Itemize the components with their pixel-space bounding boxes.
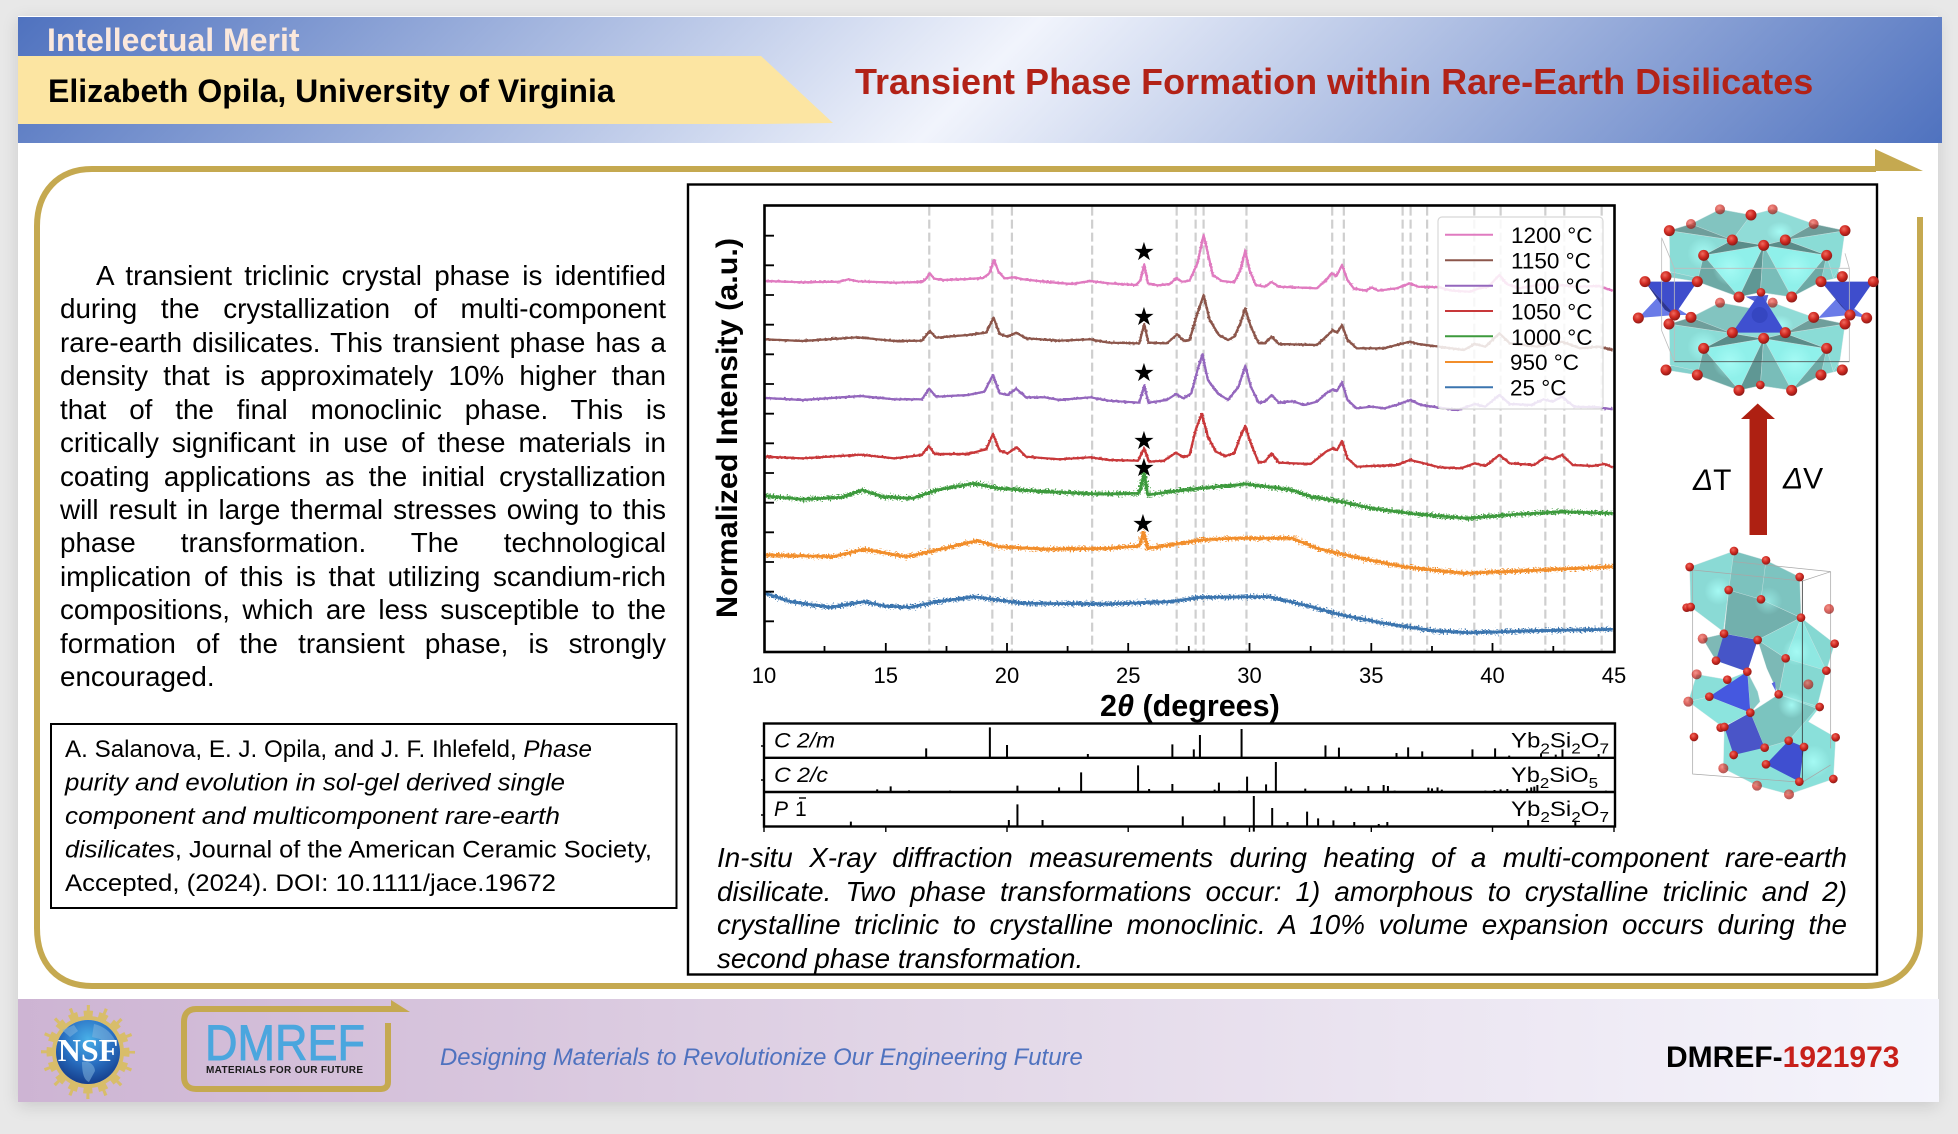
crystal structure: triclinic bottom (1682, 547, 1840, 799)
central gap (1750, 647, 1773, 698)
star markers: ★ (1133, 453, 1155, 482)
DMREF tagline: MATERIALS FOR OUR FUTURE (206, 1065, 363, 1076)
compound labels (1511, 730, 1609, 826)
phase labels: 1 (795, 798, 807, 821)
main body text: density that is approximately 10% higher than (60, 360, 666, 391)
compound labels: O (1581, 730, 1599, 752)
figure panel border (688, 184, 1877, 974)
compound labels: Si (1550, 798, 1571, 821)
legend: 1150 °C (1511, 248, 1591, 274)
reference stick patterns (761, 724, 1615, 832)
presenter name: Elizabeth Opila, University of Virginia (48, 73, 615, 109)
NSF logo (45, 1009, 131, 1095)
x axis tick labels: 10 (752, 663, 776, 688)
footer band (18, 999, 1939, 1102)
compound labels: 2 (1571, 809, 1581, 826)
compound labels: SiO (1549, 764, 1589, 787)
x axis tick labels: 40 (1480, 663, 1505, 688)
compound labels: 2 (1571, 740, 1581, 758)
arrow: heating transformation (1741, 404, 1775, 535)
figure caption: disilicate. Two phase transformations occur: 1) amorphous to crystalline triclinic and 2) (717, 876, 1847, 907)
phase labels: P (774, 798, 788, 821)
compound labels: 2 (1540, 775, 1549, 792)
figure caption: second phase transformation. (717, 943, 1083, 974)
compound labels: 7 (1599, 809, 1609, 826)
plot frame and ticks (764, 206, 1614, 652)
stick panel frames (761, 724, 1615, 832)
crystalline traces noise (766, 235, 1613, 468)
phase labels: C 2/c (774, 764, 829, 787)
section label: Intellectual Merit (47, 22, 300, 58)
DMREF logo (184, 1000, 410, 1089)
main body text: compositions, which are less susceptible to the (60, 594, 666, 625)
compound labels: Yb (1511, 798, 1537, 821)
main body text: implication of this is that utilizing scandium-rich (60, 561, 666, 592)
main body text: during the crystallization of multi-component (60, 293, 666, 324)
compound labels: 5 (1589, 775, 1598, 792)
x axis title: 2θ (degrees) (1100, 689, 1280, 723)
x axis tick labels: 15 (874, 663, 898, 688)
gold frame arrow (37, 149, 1923, 986)
legend (1438, 217, 1603, 409)
crystal structure: monoclinic top (1633, 204, 1879, 396)
figure caption: In-situ X-ray diffraction measurements during heating of a multi-component rare-earth (717, 842, 1847, 873)
main body text: coating applications as the initial crystallization (60, 461, 666, 492)
citation box (51, 724, 676, 908)
P-1 sticks (851, 796, 1575, 832)
x axis tick labels: 35 (1359, 663, 1384, 688)
figure caption: crystalline triclinic to crystalline monoclinic. A 10% volume expansion occurs during the (717, 909, 1847, 940)
legend: 1000 °C (1511, 325, 1593, 350)
x axis tick labels: 20 (995, 663, 1019, 688)
C 2/c sticks (877, 762, 1606, 792)
main body text: will result in large thermal stresses owing to this (60, 494, 666, 525)
compound labels: 2 (1540, 740, 1550, 758)
citation box: Accepted, (2024). DOI: 10.1111/jace.19672 (65, 870, 556, 897)
footer tagline: Designing Materials to Revolutionize Our Engineering Future (440, 1044, 1083, 1071)
reference dashed lines (929, 207, 1602, 651)
x axis tick labels: 25 (1116, 663, 1140, 688)
DMREF wordmark: DMREF (205, 1015, 365, 1071)
y axis title: Normalized Intensity (a.u.) (711, 238, 744, 618)
compound labels: 2 (1540, 809, 1550, 826)
silicate tetrahedra (1638, 282, 1873, 333)
citation box: purity and evolution in sol-gel derived single (64, 770, 565, 796)
legend: 1100 °C (1511, 274, 1591, 299)
legend: 950 °C (1510, 350, 1579, 375)
NSF wordmark: NSF (58, 1032, 118, 1068)
x axis tick labels: 30 (1237, 663, 1262, 688)
star markers: ★ (1133, 358, 1155, 387)
silicate tetrahedra (1709, 634, 1804, 782)
star markers: ★ (1133, 237, 1155, 266)
main body text: phase transformation. The technological (60, 527, 666, 558)
compound labels: Yb (1511, 764, 1537, 787)
award number: DMREF-1921973 (1666, 1041, 1899, 1074)
citation box: disilicates, Journal of the American Ceramic Society, (65, 836, 652, 864)
phase labels: C 2/m (774, 730, 835, 752)
header ribbon: presenter name (18, 56, 833, 124)
compound labels: Yb (1511, 730, 1537, 752)
legend: 1050 °C (1511, 300, 1593, 324)
amorphous traces noise (766, 473, 1613, 633)
phase labels (774, 730, 835, 821)
title: Transient Phase Formation within Rare-Earth Disilicates (855, 61, 1813, 102)
legend: 1200 °C (1511, 223, 1593, 248)
amorphous traces base (766, 473, 1613, 633)
main body text: rare-earth disilicates. This transient phase has a (60, 327, 666, 358)
main body text: that of the final monoclinic phase. This is (60, 394, 666, 425)
star markers (1132, 237, 1155, 538)
main body text (60, 260, 666, 692)
compound labels: O (1581, 798, 1599, 821)
citation box: A. Salanova, E. J. Opila, and J. F. Ihlefeld, Phase (65, 736, 592, 763)
XRD line chart (711, 206, 1626, 723)
header band (18, 17, 1942, 143)
legend: 25 °C (1510, 376, 1567, 400)
citation box: component and multicomponent rare-earth (65, 803, 560, 830)
label: delta V: ΔV (1782, 462, 1823, 496)
compound labels: 7 (1599, 740, 1609, 758)
figure caption (717, 842, 1847, 974)
main body text: encouraged. (60, 661, 215, 692)
x axis tick labels (752, 663, 1626, 688)
C 2/m sticks (926, 727, 1599, 758)
star markers: ★ (1133, 302, 1155, 331)
x axis tick labels: 45 (1602, 663, 1626, 688)
compound labels: Si (1550, 730, 1571, 752)
label: delta T: ΔT (1692, 464, 1731, 497)
main body text: A transient triclinic crystal phase is identified (96, 260, 666, 291)
main body text: formation of the transient phase, is strongly (60, 628, 666, 659)
star markers: ★ (1133, 426, 1155, 455)
crystalline traces base (766, 235, 1613, 468)
main body text: critically significant in use of these materials in (60, 427, 666, 458)
star markers: ★ (1132, 509, 1154, 538)
